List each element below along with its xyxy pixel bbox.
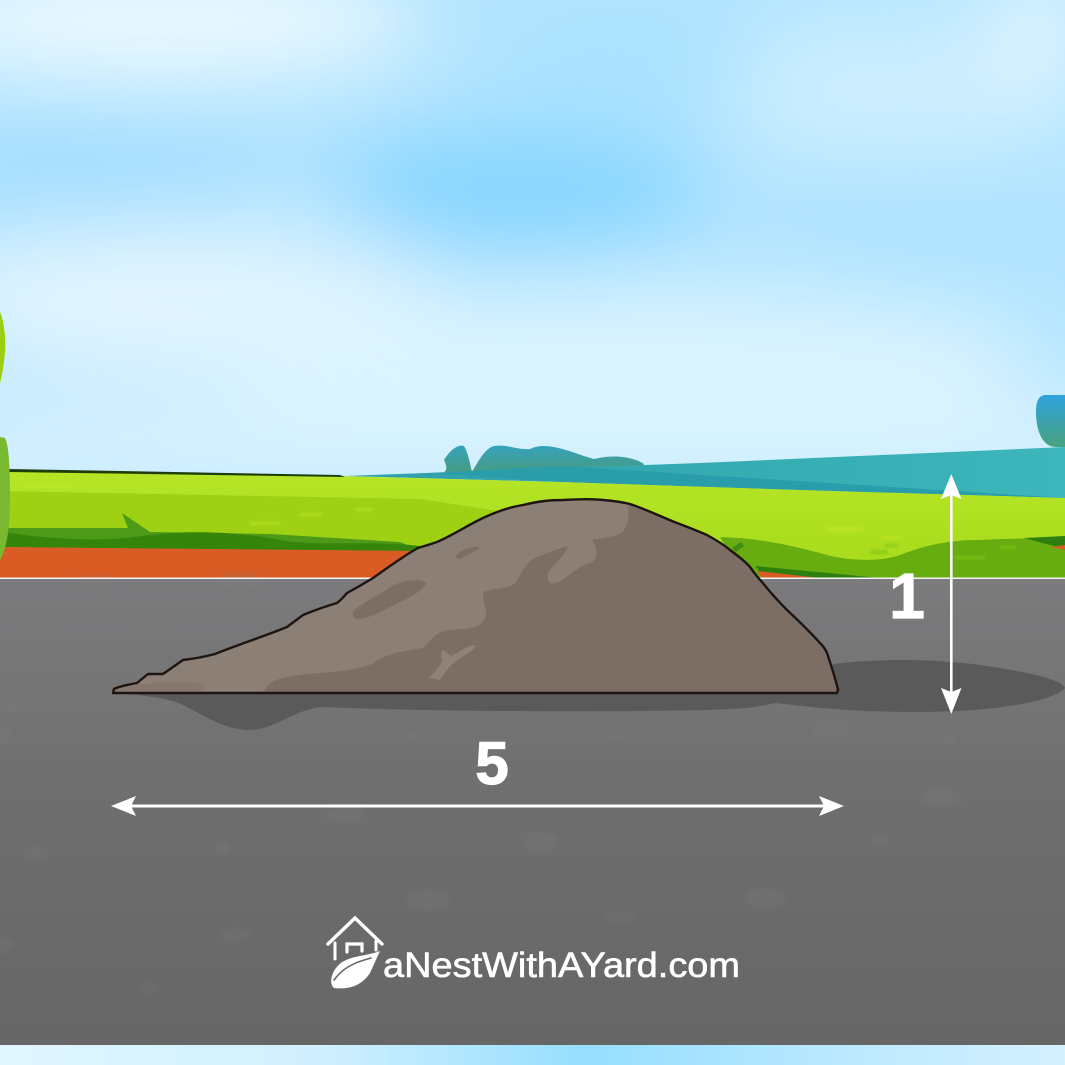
green field bbox=[0, 469, 1065, 578]
label: height 1: 1 bbox=[889, 560, 925, 632]
vertical dimension arrow bbox=[941, 474, 962, 714]
right green mounds bbox=[720, 536, 1065, 578]
distant teal hills bbox=[444, 446, 644, 472]
bottom sky strip bbox=[0, 1045, 1065, 1065]
horizon white line bbox=[0, 578, 1065, 579]
icon: house and leaf bbox=[328, 918, 382, 988]
brand name: aNestWithAYard.com bbox=[383, 946, 740, 985]
soil mound bbox=[113, 499, 850, 700]
right background bush bbox=[1036, 395, 1065, 447]
left dark green hedge bbox=[0, 513, 420, 552]
logo: A Nest With A Yard bbox=[328, 918, 740, 988]
asphalt ground bbox=[0, 573, 1065, 1045]
mound shadow bbox=[113, 660, 1065, 730]
left foreground bushes bbox=[0, 312, 10, 560]
label: length 5: 5 bbox=[475, 730, 509, 797]
teal lake band bbox=[345, 447, 1065, 498]
horizontal dimension arrow bbox=[111, 796, 844, 816]
orange soil strip bbox=[0, 547, 420, 578]
sky background bbox=[0, 0, 1065, 482]
